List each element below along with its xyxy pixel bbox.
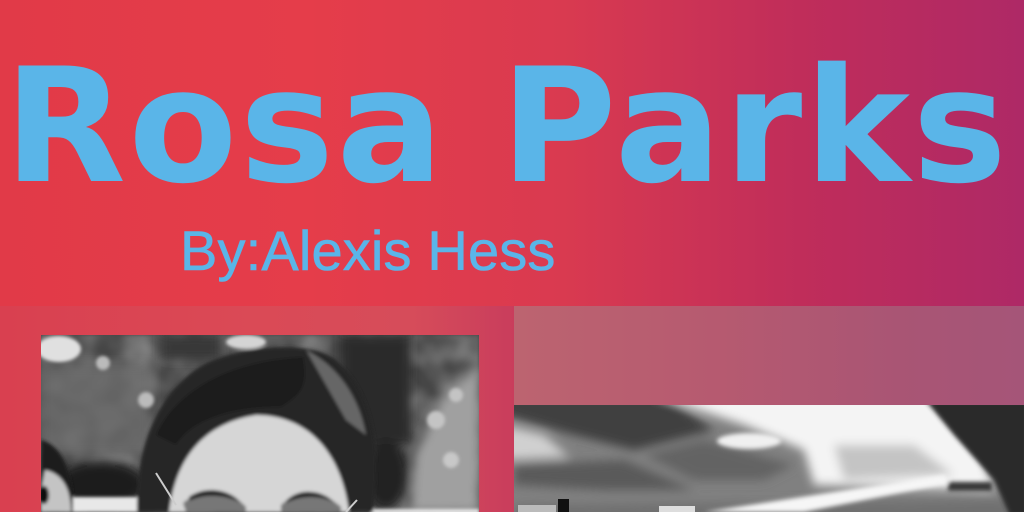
title: Rosa Parks	[4, 35, 1009, 219]
panel: portrait	[0, 306, 514, 512]
panel: upper right banner	[514, 306, 1024, 405]
photo: portrait of Rosa Parks	[41, 335, 479, 512]
photo: bus scene	[514, 405, 1024, 512]
byline: By:Alexis Hess	[180, 219, 556, 282]
